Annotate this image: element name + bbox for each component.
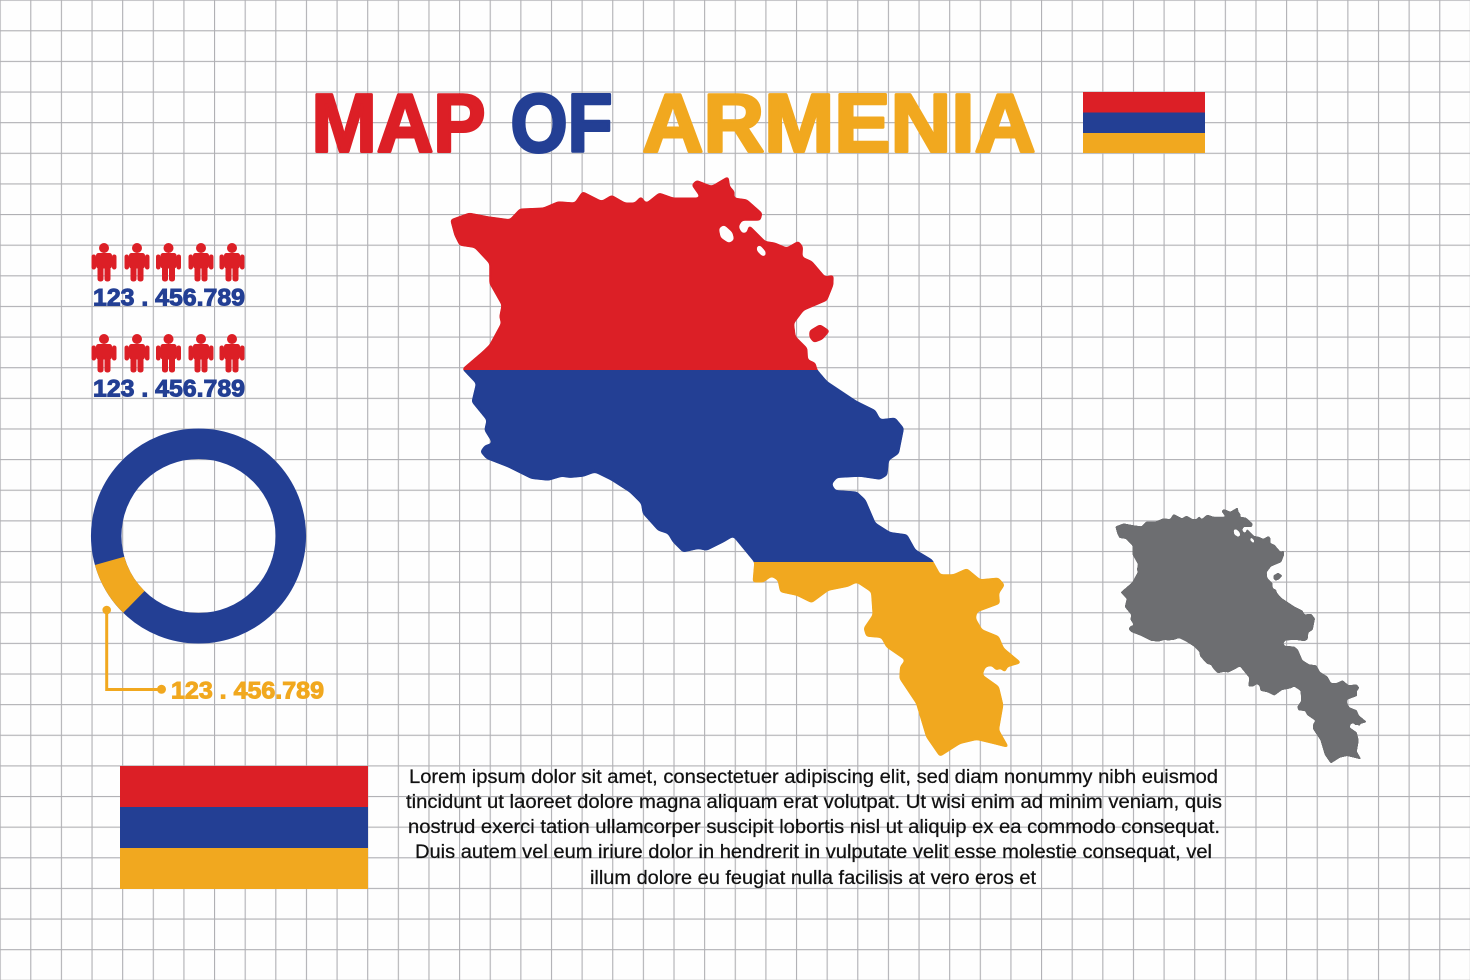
population row 2 <box>92 334 245 402</box>
body text: tincidunt ut laoreet dolore magna aliquam erat volutpat. Ut wisi enim ad minim veniam, quis <box>406 792 1222 813</box>
icon: small flag of Armenia <box>1083 92 1205 153</box>
body text: Duis autem vel eum iriure dolor in hendrerit in vulputate velit esse molestie consequat, vel <box>415 842 1212 863</box>
title: MAP <box>312 76 486 170</box>
callout: donut leader line and value <box>102 606 324 704</box>
population row 1: 123 . 456.789 <box>93 284 245 312</box>
title: OF <box>510 76 612 170</box>
map of Armenia in flag colours <box>451 177 1020 756</box>
body text: illum dolore eu feugiat nulla facilisis at vero eros et <box>590 868 1037 889</box>
donut chart <box>106 444 291 628</box>
small grey map of Armenia <box>1116 508 1366 763</box>
body text: nostrud exerci tation ullamcorper suscipit lobortis nisl ut aliquip ex ea commodo consequat. <box>408 817 1220 838</box>
population row 1 <box>92 243 245 312</box>
body text <box>406 767 1222 889</box>
title: ARMENIA <box>642 76 1036 170</box>
body text: Lorem ipsum dolor sit amet, consectetuer adipiscing elit, sed diam nonummy nibh euismod <box>409 767 1218 788</box>
title <box>312 76 1036 170</box>
callout: donut leader line and value: 123 . 456.789 <box>171 678 324 704</box>
large flag of Armenia <box>120 766 368 889</box>
population row 2: 123 . 456.789 <box>93 376 245 402</box>
